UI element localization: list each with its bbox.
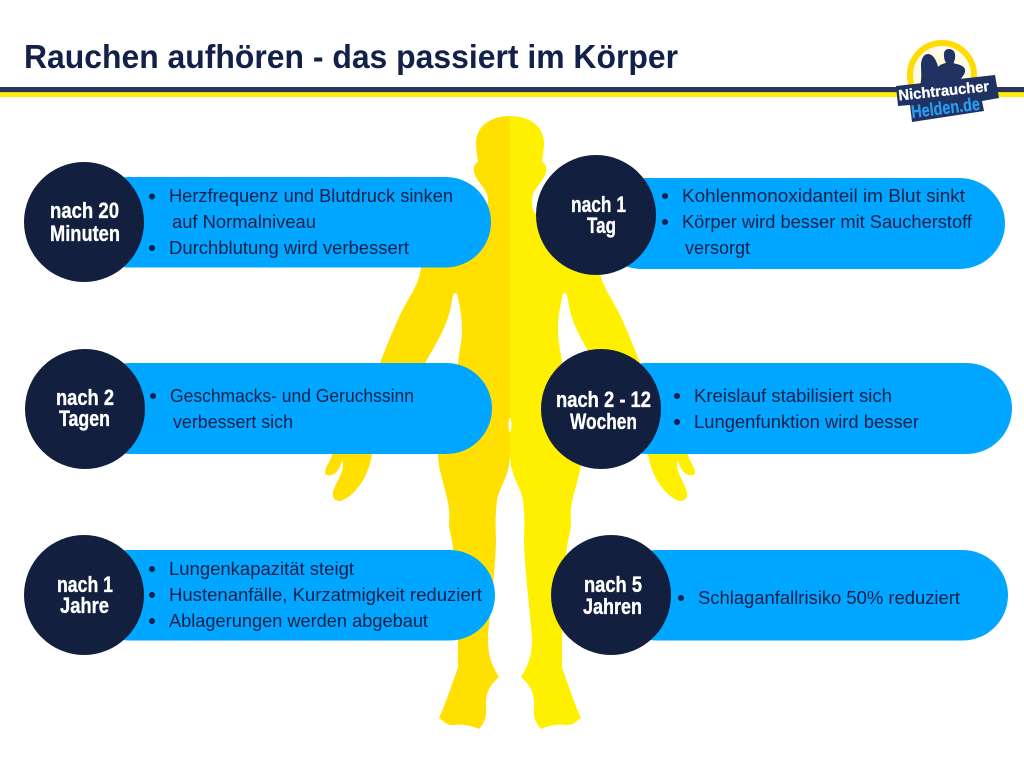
body: left half bbox=[325, 116, 510, 729]
list: Lungenkapazität steigt bbox=[169, 559, 354, 579]
body: crotch highlight bbox=[508, 418, 512, 432]
badge bbox=[24, 535, 144, 655]
logo silhouette: man bbox=[937, 49, 965, 88]
logo text: Helden.de: Helden.de bbox=[910, 94, 981, 122]
logo text: Nichtraucher: Nichtraucher bbox=[898, 78, 990, 104]
badge label: Tagen bbox=[59, 406, 110, 431]
badge label bbox=[571, 192, 626, 238]
pill bbox=[84, 177, 491, 268]
badge bbox=[25, 349, 145, 469]
panel: nach 1 Tag bbox=[536, 155, 1005, 275]
badge bbox=[24, 162, 144, 282]
badge label bbox=[556, 387, 651, 434]
list: Lungenfunktion wird besser bbox=[694, 412, 919, 432]
pill bbox=[84, 550, 495, 640]
list: Durchblutung wird verbessert bbox=[169, 238, 409, 258]
list: Geschmacks- und Geruchssinn bbox=[170, 386, 414, 406]
header rule bbox=[0, 87, 1024, 97]
title: Rauchen aufhören - das passiert im Körper bbox=[24, 39, 678, 76]
list bbox=[149, 186, 453, 258]
badge label: nach 20 bbox=[50, 198, 119, 223]
badge label bbox=[56, 385, 114, 431]
list: Ablagerungen werden abgebaut bbox=[169, 611, 428, 631]
badge bbox=[536, 155, 656, 275]
panel: nach 2 Tagen bbox=[25, 349, 492, 469]
badge label: nach 5 bbox=[584, 572, 642, 597]
logo banner bbox=[896, 75, 999, 122]
pill bbox=[85, 363, 492, 454]
body: right half bbox=[510, 116, 695, 729]
logo silhouette: woman bbox=[920, 54, 942, 86]
body silhouette bbox=[325, 116, 695, 729]
panel: nach 5 Jahren bbox=[551, 535, 1008, 655]
list: Herzfrequenz und Blutdruck sinken bbox=[169, 186, 453, 206]
badge label: nach 1 bbox=[57, 572, 113, 597]
list bbox=[150, 386, 414, 432]
badge label bbox=[50, 198, 120, 246]
badge label: Tag bbox=[587, 213, 616, 238]
list: Körper wird besser mit Saucherstoff bbox=[682, 212, 973, 232]
list: auf Normalniveau bbox=[172, 212, 316, 232]
badge label: Jahren bbox=[583, 594, 642, 619]
badge label: nach 2 - 12 bbox=[556, 387, 651, 412]
pill bbox=[611, 550, 1008, 640]
list: Kreislauf stabilisiert sich bbox=[694, 386, 892, 406]
pill bbox=[601, 363, 1012, 454]
badge bbox=[551, 535, 671, 655]
list bbox=[662, 186, 973, 258]
badge label: Jahre bbox=[60, 593, 109, 618]
list: Schlaganfallrisiko 50% reduziert bbox=[698, 588, 960, 608]
list: versorgt bbox=[685, 238, 750, 258]
panel: nach 2 - 12 Wochen bbox=[541, 349, 1012, 469]
list: verbessert sich bbox=[173, 412, 293, 432]
logo: Nichtraucher Helden bbox=[896, 43, 999, 122]
badge bbox=[541, 349, 661, 469]
panel: nach 1 Jahre bbox=[24, 535, 495, 655]
badge label bbox=[57, 572, 113, 618]
pill bbox=[596, 178, 1005, 269]
badge label: nach 1 bbox=[571, 192, 626, 217]
badge label: Wochen bbox=[570, 409, 637, 434]
panel: nach 20 Minuten bbox=[24, 162, 491, 282]
list: Hustenanfälle, Kurzatmigkeit reduziert bbox=[169, 585, 482, 605]
list: Kohlenmonoxidanteil im Blut sinkt bbox=[682, 186, 965, 206]
badge label: Minuten bbox=[50, 221, 120, 246]
list bbox=[674, 386, 919, 432]
badge label bbox=[583, 572, 642, 619]
badge label: nach 2 bbox=[56, 385, 114, 410]
list bbox=[149, 559, 482, 631]
